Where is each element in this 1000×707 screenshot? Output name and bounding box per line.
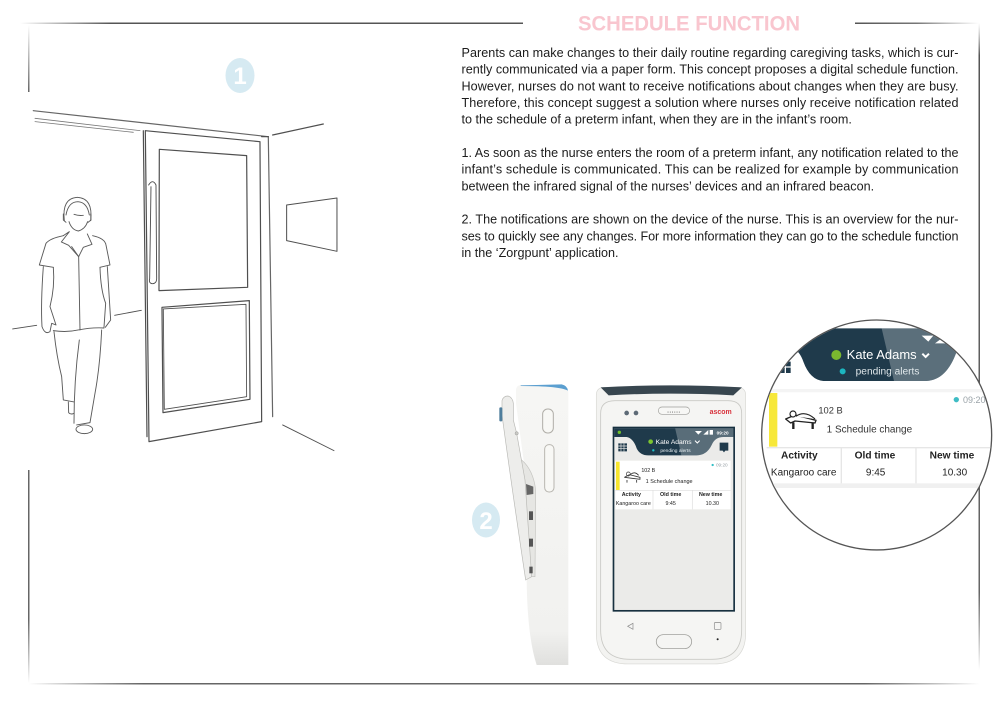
text block: introduction: Therefore, this concept suggest a solution where nurses only receive notification related [462, 96, 958, 110]
magnified header [793, 328, 957, 381]
magnified detail circle: 9:45 [866, 467, 886, 478]
text block: step 2: in the ‘Zorgpunt’ application. [462, 246, 619, 260]
number badge 1: 1 [233, 63, 247, 90]
magnified detail circle: New time [930, 451, 975, 462]
text block: step 2: 2. The notifications are shown on the device of the nurse. This is an overview for the nur- [462, 213, 958, 227]
number badge 2: 2 [479, 508, 493, 535]
magnified detail circle [760, 320, 993, 550]
text block: introduction: rently communicated via a paper form. This concept proposes a digital schedule function. [462, 63, 958, 77]
magnified detail circle: Kangaroo care [771, 467, 837, 478]
device: front view: 9:45 [665, 501, 676, 507]
device: front view: 10.30 [706, 501, 719, 507]
text block: introduction: Parents can make changes to their daily routine regarding caregiving tasks, which is cur- [462, 46, 958, 60]
text block: introduction [462, 46, 958, 127]
illustration: nurse walking through door [13, 111, 337, 451]
number badge 2 [472, 502, 500, 538]
device: front view: Activity [622, 492, 641, 498]
magnified detail circle: Activity [781, 451, 818, 462]
device: front view: 1 Schedule change [646, 479, 693, 485]
wall and door lines [13, 111, 337, 451]
magnified detail circle: Kate Adams [847, 347, 917, 362]
nurse figure [39, 197, 111, 434]
device: side view with clip [499, 384, 568, 665]
magnified detail circle: 10.30 [942, 467, 968, 478]
magnified detail circle: Old time [855, 451, 896, 462]
text block: step 1: 1. As soon as the nurse enters the room of a preterm infant, any notification related to the [462, 146, 958, 160]
device: front view: New time [699, 492, 722, 498]
device: front view [596, 385, 746, 664]
device hardware buttons [628, 623, 721, 649]
magnified detail circle: 102 B [818, 405, 843, 415]
text block: step 1: infant’s schedule is communicated. This can be realized for example by communication [462, 163, 958, 177]
text block: introduction: However, nurses do not want to receive notifications about changes when they are busy. [462, 79, 958, 93]
device: front view: Old time [660, 492, 681, 498]
device: front view: ascom [710, 409, 732, 416]
device: front view: 102 B [641, 468, 656, 474]
screen [613, 427, 735, 612]
device: front view: pending alerts [660, 448, 691, 454]
magnified detail circle: pending alerts [856, 367, 919, 378]
top dark bar [601, 385, 742, 395]
magnified detail circle: 1 Schedule change [827, 425, 913, 436]
text block: step 2: ses to quickly see any changes. For more information they can go to the schedule function [462, 229, 958, 243]
text block: step 1 [462, 146, 958, 193]
number badge 1 [226, 58, 254, 93]
text block: introduction: to the schedule of a preterm infant, when they are in the infant’s room. [462, 113, 852, 127]
magnified alert card [769, 393, 777, 447]
title: SCHEDULE FUNCTION [578, 12, 800, 36]
device: front view: Kangaroo care [616, 501, 651, 507]
device: front view: 09:20 [717, 431, 729, 436]
magnified detail circle: 09:20 [963, 395, 985, 405]
text block: step 1: between the infrared signal of the nurses’ devices and an infrared beacon. [462, 179, 874, 193]
text block: step 2 [462, 213, 958, 260]
device: front view: ...... [667, 408, 681, 414]
device body [596, 387, 746, 664]
device: front view: 09:20 [716, 463, 728, 468]
device: front view: Kate Adams [656, 439, 692, 446]
